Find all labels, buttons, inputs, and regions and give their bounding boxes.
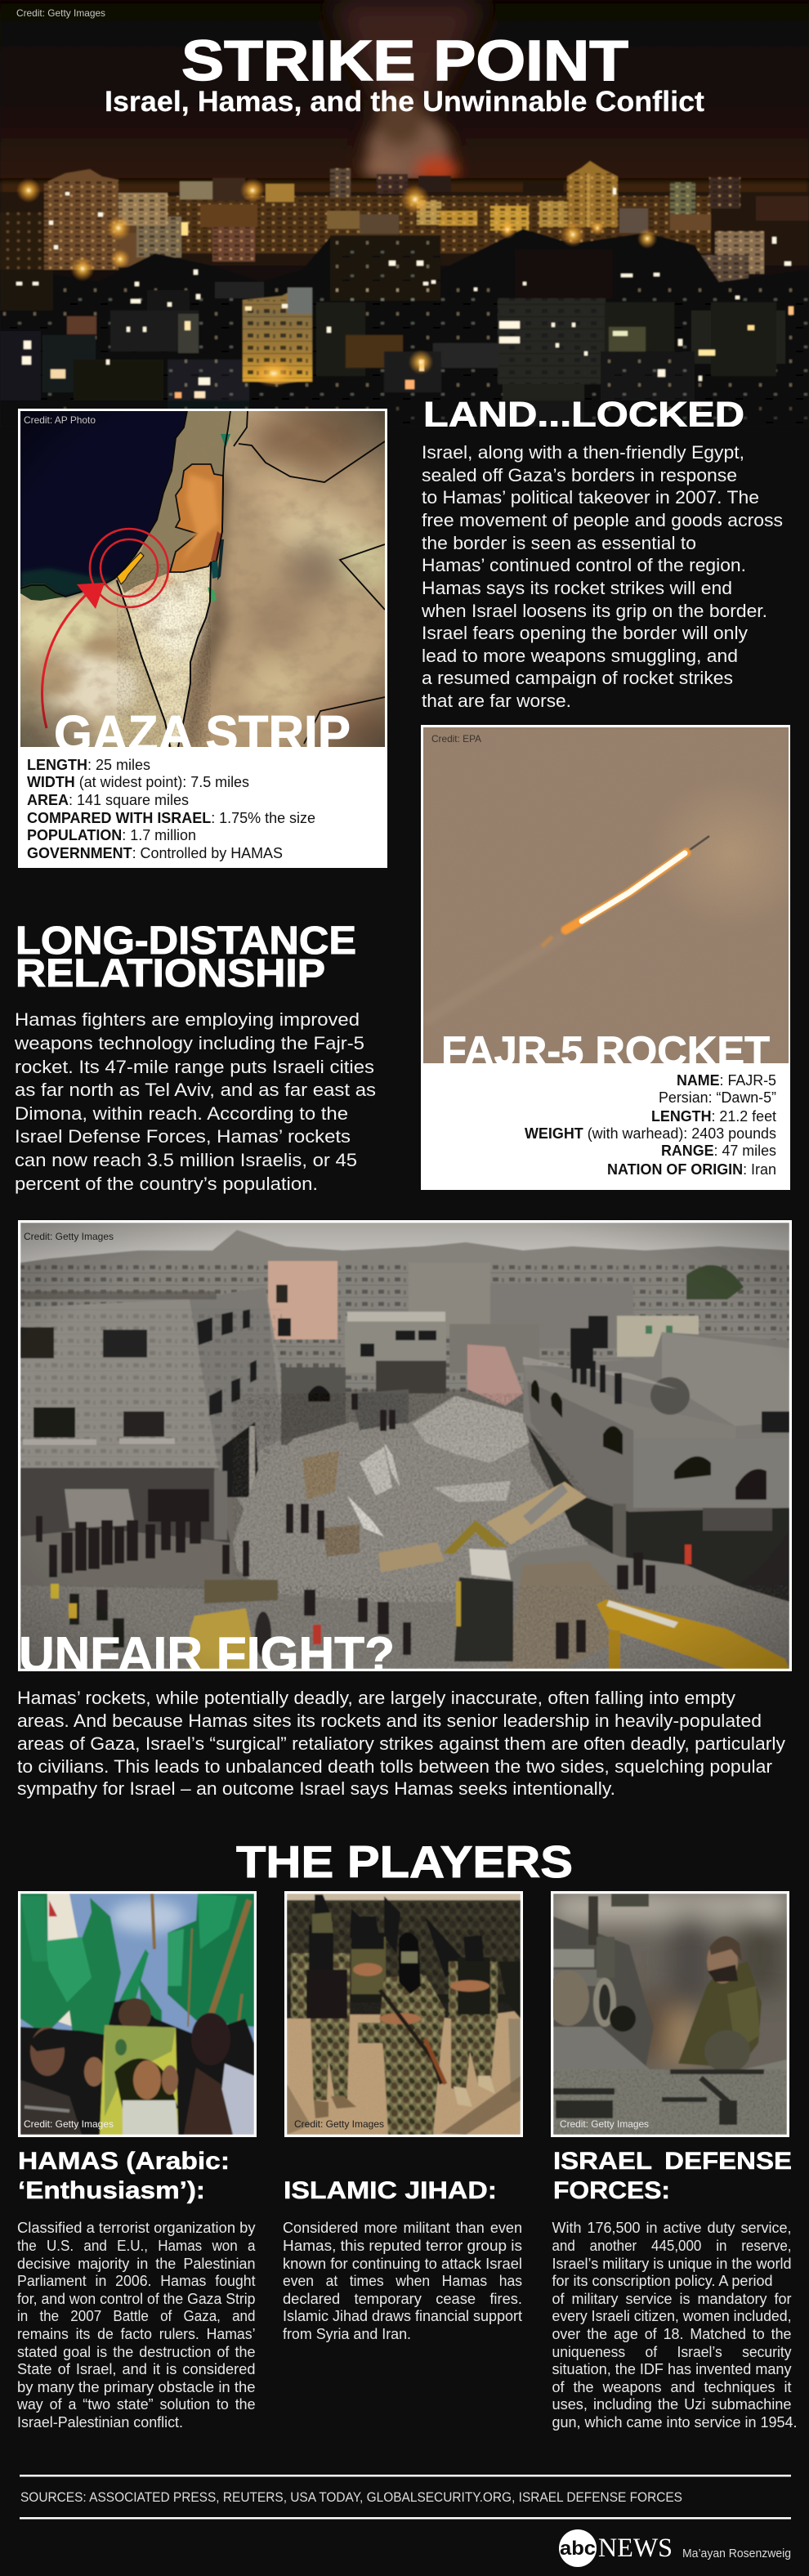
Gaza strip highlight <box>117 552 144 584</box>
text block: Hamas: decisive majority in the Palestinian <box>17 2256 255 2272</box>
borders <box>20 411 385 747</box>
rocket facts list: NAME: FAJR-5 <box>677 1072 776 1089</box>
left building ground floor <box>20 1468 230 1543</box>
text block: Hamas <box>16 2220 256 2431</box>
back centre fighter <box>351 1916 386 2043</box>
Hamas photo credit: Credit: Getty Images <box>24 2118 114 2130</box>
rocket facts list <box>525 1072 776 1178</box>
right building <box>523 1332 789 1508</box>
text block: Hamas: stated goal is the destruction of the <box>17 2344 255 2360</box>
central rubble <box>233 1396 588 1602</box>
rocket facts list: NATION OF ORIGIN: Iran <box>607 1161 776 1178</box>
Sinai <box>16 579 170 748</box>
city glows <box>16 178 657 387</box>
text block: Israel Defense Forces: uniqueness of Israel’s security <box>552 2344 791 2360</box>
author credit: Ma’ayan Rosenzweig <box>682 2547 791 2560</box>
hero photo credit: Credit: Getty Images <box>16 7 105 19</box>
panel: Land locked text: that are far worse. <box>422 691 571 711</box>
red arrow <box>42 583 105 728</box>
ground <box>20 1545 789 1669</box>
satellite dish <box>650 1377 690 1415</box>
heading: Israel Defense Forces <box>553 2148 792 2204</box>
panel: Land locked text: Israel fears opening the border will only <box>422 623 748 643</box>
map credit: Credit: AP Photo <box>24 414 96 426</box>
text block: Hamas: Classified a terrorist organization by <box>17 2220 255 2236</box>
text block: Israel Defense Forces: uses, including the Uzi submachine <box>552 2396 791 2413</box>
text block: unfair fight: areas. And because Hamas sites its rockets and its senior leadership in heavily-populated <box>17 1711 762 1731</box>
sources line: SOURCES: ASSOCIATED PRESS, REUTERS, USA TODAY, GLOBALSECURITY.ORG, ISRAEL DEFENSE FORCES <box>20 2489 682 2505</box>
Gaza facts list: COMPARED WITH ISRAEL: 1.75% the size <box>27 810 315 826</box>
rocket heading: FAJR-5 ROCKET <box>441 1028 770 1074</box>
panel: Land locked text: Israel, along with a then-friendly Egypt, <box>422 442 744 463</box>
left fighter <box>291 1912 356 2118</box>
Gaza facts list <box>27 757 315 861</box>
photo: Hamas rally <box>18 1891 257 2137</box>
text block: Israel Defense Forces: Israel’s military is unique in the world <box>552 2256 791 2272</box>
text block: long-distance relationship: Israel Defense Forces, Hamas’ rockets <box>15 1126 351 1147</box>
text block: Israel Defense Forces: over the age of 18. Matched to the <box>552 2326 791 2342</box>
text block: Hamas: the U.S. and E.U., Hamas won a <box>17 2238 256 2254</box>
text block: Israel Defense Forces: for its conscription policy. A period <box>552 2273 773 2289</box>
right fighter <box>449 1935 498 2107</box>
photo: Islamic Jihad fighters <box>284 1891 523 2137</box>
text block: Hamas: in the 2007 Battle of Gaza, and <box>17 2308 255 2324</box>
text block: long-distance relationship: can now reach 3.5 million Israelis, or 45 <box>15 1150 357 1170</box>
people on roof <box>572 1357 622 1404</box>
under the right building <box>527 1426 789 1602</box>
panel: Land locked text <box>421 442 783 711</box>
panel: Land locked text: lead to more weapons smuggling, and <box>422 646 738 666</box>
photo of destroyed buildings <box>20 1223 789 1669</box>
yellow loader <box>190 1580 278 1669</box>
text block: Islamic Jihad: Hamas, this reputed terror group is <box>283 2238 522 2254</box>
West Bank <box>170 464 223 572</box>
heading: long-distance relationship <box>16 919 356 995</box>
panel: Gaza Strip card <box>16 409 392 868</box>
heading: the players: THE PLAYERS <box>236 1836 573 1887</box>
photo: Israeli soldier on a tank <box>547 1891 789 2137</box>
tank deck <box>553 2059 787 2135</box>
text block: long-distance relationship: Hamas fighters are employing improved <box>15 1009 360 1030</box>
panel: Land locked text: free movement of people and goods across <box>422 510 783 530</box>
panel: Land locked text: sealed off Gaza’s borders in response <box>422 465 737 485</box>
text block: Israel Defense Forces: situation, the IDF has invented many <box>552 2361 791 2377</box>
black banners <box>315 1894 466 1978</box>
text block: Islamic Jihad: Islamic Jihad draws financial support <box>283 2308 522 2324</box>
title: STRIKE POINT <box>181 29 628 92</box>
left building <box>20 1287 286 1512</box>
rocket facts list: RANGE: 47 miles <box>661 1143 776 1159</box>
Gaza facts list: WIDTH (at widest point): 7.5 miles <box>27 774 249 790</box>
water tanks <box>570 1328 593 1369</box>
text block: Israel Defense Forces: With 176,500 in active duty service, <box>552 2220 791 2236</box>
rocket credit: Credit: EPA <box>431 733 481 745</box>
flag poles <box>152 1894 249 2043</box>
tank turret <box>547 1894 654 2069</box>
Gaza Strip heading: GAZA STRIP <box>54 706 351 763</box>
water bodies <box>211 561 218 579</box>
soldier <box>678 1936 762 2068</box>
hero photo: night skyline of Gaza <box>0 0 809 427</box>
panel: Fajr-5 rocket card <box>421 725 809 1190</box>
text block: Israel Defense Forces: every Israeli citizen, women included, <box>552 2308 791 2324</box>
heading: Israel Defense Forces: ISRAEL DEFENSE <box>553 2148 792 2175</box>
helmet <box>704 2030 750 2073</box>
heading: long-distance relationship: RELATIONSHIP <box>16 952 325 995</box>
text block: long-distance relationship: as far north as Tel Aviv, and as far east as <box>15 1080 376 1100</box>
rocket photo <box>423 727 809 1074</box>
panel: Land locked text: Hamas says its rocket strikes will end <box>422 578 732 598</box>
logo: ABC News <box>559 2529 673 2567</box>
poster <box>100 2025 178 2135</box>
Gaza facts list: LENGTH: 25 miles <box>27 757 150 773</box>
crowd <box>20 1998 254 2135</box>
north strip <box>121 411 230 593</box>
pink building <box>268 1261 337 1339</box>
text block: Islamic Jihad: declared temporary cease fires. <box>283 2291 522 2307</box>
text block: Hamas: by many the primary obstacle in the <box>17 2379 255 2395</box>
green flags <box>20 1894 254 2059</box>
heading: Islamic Jihad: ISLAMIC JIHAD: <box>284 2177 497 2204</box>
Gaza facts list: GOVERNMENT: Controlled by HAMAS <box>27 845 283 861</box>
map of Gaza and the region <box>16 409 392 763</box>
text block: unfair fight: to civilians. This leads to unbalanced death tolls between the two sides, squelching popular <box>17 1756 772 1777</box>
heading: Hamas: HAMAS (Arabic: <box>18 2148 230 2175</box>
text block: Hamas: State of Israel, and it is considered <box>17 2361 255 2377</box>
heading: unfair fight: UNFAIR FIGHT? <box>19 1627 395 1682</box>
Gaza facts list: POPULATION: 1.7 million <box>27 827 196 843</box>
text block: Islamic Jihad: even at times when Hamas has <box>283 2273 522 2289</box>
Negev <box>117 562 211 747</box>
text block: Israel Defense Forces: of military service is mandatory for <box>552 2291 792 2307</box>
text block: Israel Defense Forces: and another 445,000 in reserve, <box>552 2238 791 2254</box>
yellow excavator arm <box>597 1599 789 1669</box>
text block: unfair fight: sympathy for Israel – an outcome Israel says Hamas seeks intentionally. <box>17 1778 615 1799</box>
panel: Land locked text: Hamas’ continued control of the region. <box>422 555 746 575</box>
text block: Islamic Jihad: from Syria and Iran. <box>283 2326 411 2342</box>
text block: Hamas: remains its de facto rulers. Hamas’ <box>17 2326 255 2342</box>
IDF photo credit: Credit: Getty Images <box>560 2118 649 2130</box>
text block: long-distance relationship: rocket. Its 47-mile range puts Israeli cities <box>15 1057 374 1077</box>
text block: long-distance relationship: percent of the country’s population. <box>15 1174 318 1194</box>
text block: Hamas: Israel-Palestinian conflict. <box>17 2414 183 2431</box>
heading: land locked: LAND...LOCKED <box>423 395 744 435</box>
rocket facts list: LENGTH: 21.2 feet <box>651 1108 776 1125</box>
crowd left <box>36 1393 655 1659</box>
text block: long-distance relationship <box>14 1009 376 1194</box>
text block: Islamic Jihad <box>283 2220 522 2342</box>
collapsed slab <box>486 1482 587 1545</box>
heading: long-distance relationship: LONG-DISTANCE <box>16 919 356 963</box>
text block: Israel Defense Forces <box>552 2220 798 2431</box>
Gaza facts list: AREA: 141 square miles <box>27 792 189 808</box>
logo: ABC News: abc <box>560 2538 596 2560</box>
heading: Hamas: ‘Enthusiasm’): <box>18 2177 205 2204</box>
rubble photo credit: Credit: Getty Images <box>24 1231 114 1242</box>
text block: Islamic Jihad: Considered more militant than even <box>283 2220 522 2236</box>
Jihad photo credit: Credit: Getty Images <box>294 2118 384 2130</box>
text block: Hamas: way of a “two state” solution to the <box>16 2396 256 2413</box>
digger centre <box>443 1520 513 1661</box>
lit windows <box>16 188 793 398</box>
logo: ABC News: NEWS <box>598 2534 673 2563</box>
back house <box>345 1316 446 1373</box>
heading: Israel Defense Forces: FORCES: <box>553 2177 670 2204</box>
text block: long-distance relationship: Dimona, within reach. According to the <box>15 1103 348 1124</box>
text block: unfair fight: Hamas’ rockets, while potentially deadly, are largely inaccurate, often falling into empty <box>17 1688 735 1708</box>
sea <box>20 411 187 597</box>
far towers <box>44 169 118 270</box>
panel: Land locked text: to Hamas’ political takeover in 2007. The <box>422 487 759 508</box>
rocket body and flame <box>542 836 709 946</box>
target circles <box>90 529 168 607</box>
lower dark city mass <box>0 229 809 427</box>
right edge figures <box>498 1961 521 2019</box>
subtitle: Israel, Hamas, and the Unwinnable Conflict <box>105 86 704 118</box>
panel: rubble photo <box>18 1220 792 1682</box>
gray building <box>281 1367 346 1445</box>
hero panel <box>0 0 809 435</box>
text block: long-distance relationship: weapons technology including the Fajr-5 <box>14 1033 364 1053</box>
rocket facts list: Persian: “Dawn-5” <box>659 1089 776 1106</box>
centre fighter <box>379 1932 445 2135</box>
heading: Hamas <box>18 2148 230 2204</box>
text block: unfair fight: areas of Gaza, Israel’s “surgical” retaliatory strikes against them are often deadly, particularly <box>17 1733 785 1754</box>
text block: Hamas: for, and won control of the Gaza Strip <box>17 2291 255 2307</box>
panel: Land locked text: the border is seen as essential to <box>422 533 696 553</box>
text block: Israel Defense Forces: of the weapons and techniques it <box>552 2379 791 2395</box>
panel: Land locked text: when Israel loosens its grip on the border. <box>421 601 767 621</box>
text block: Hamas: Parliament in 2006. Hamas fought <box>17 2273 255 2289</box>
text block: Islamic Jihad: known for continuing to attack Israel <box>283 2256 522 2272</box>
panel: Land locked text: a resumed campaign of rocket strikes <box>422 668 733 688</box>
text block: Israel Defense Forces: gun, which came into service in 1954. <box>552 2414 798 2431</box>
rocket facts list: WEIGHT (with warhead): 2403 pounds <box>525 1125 776 1142</box>
shadows on sand <box>441 2076 521 2135</box>
text block: unfair fight <box>17 1688 785 1799</box>
